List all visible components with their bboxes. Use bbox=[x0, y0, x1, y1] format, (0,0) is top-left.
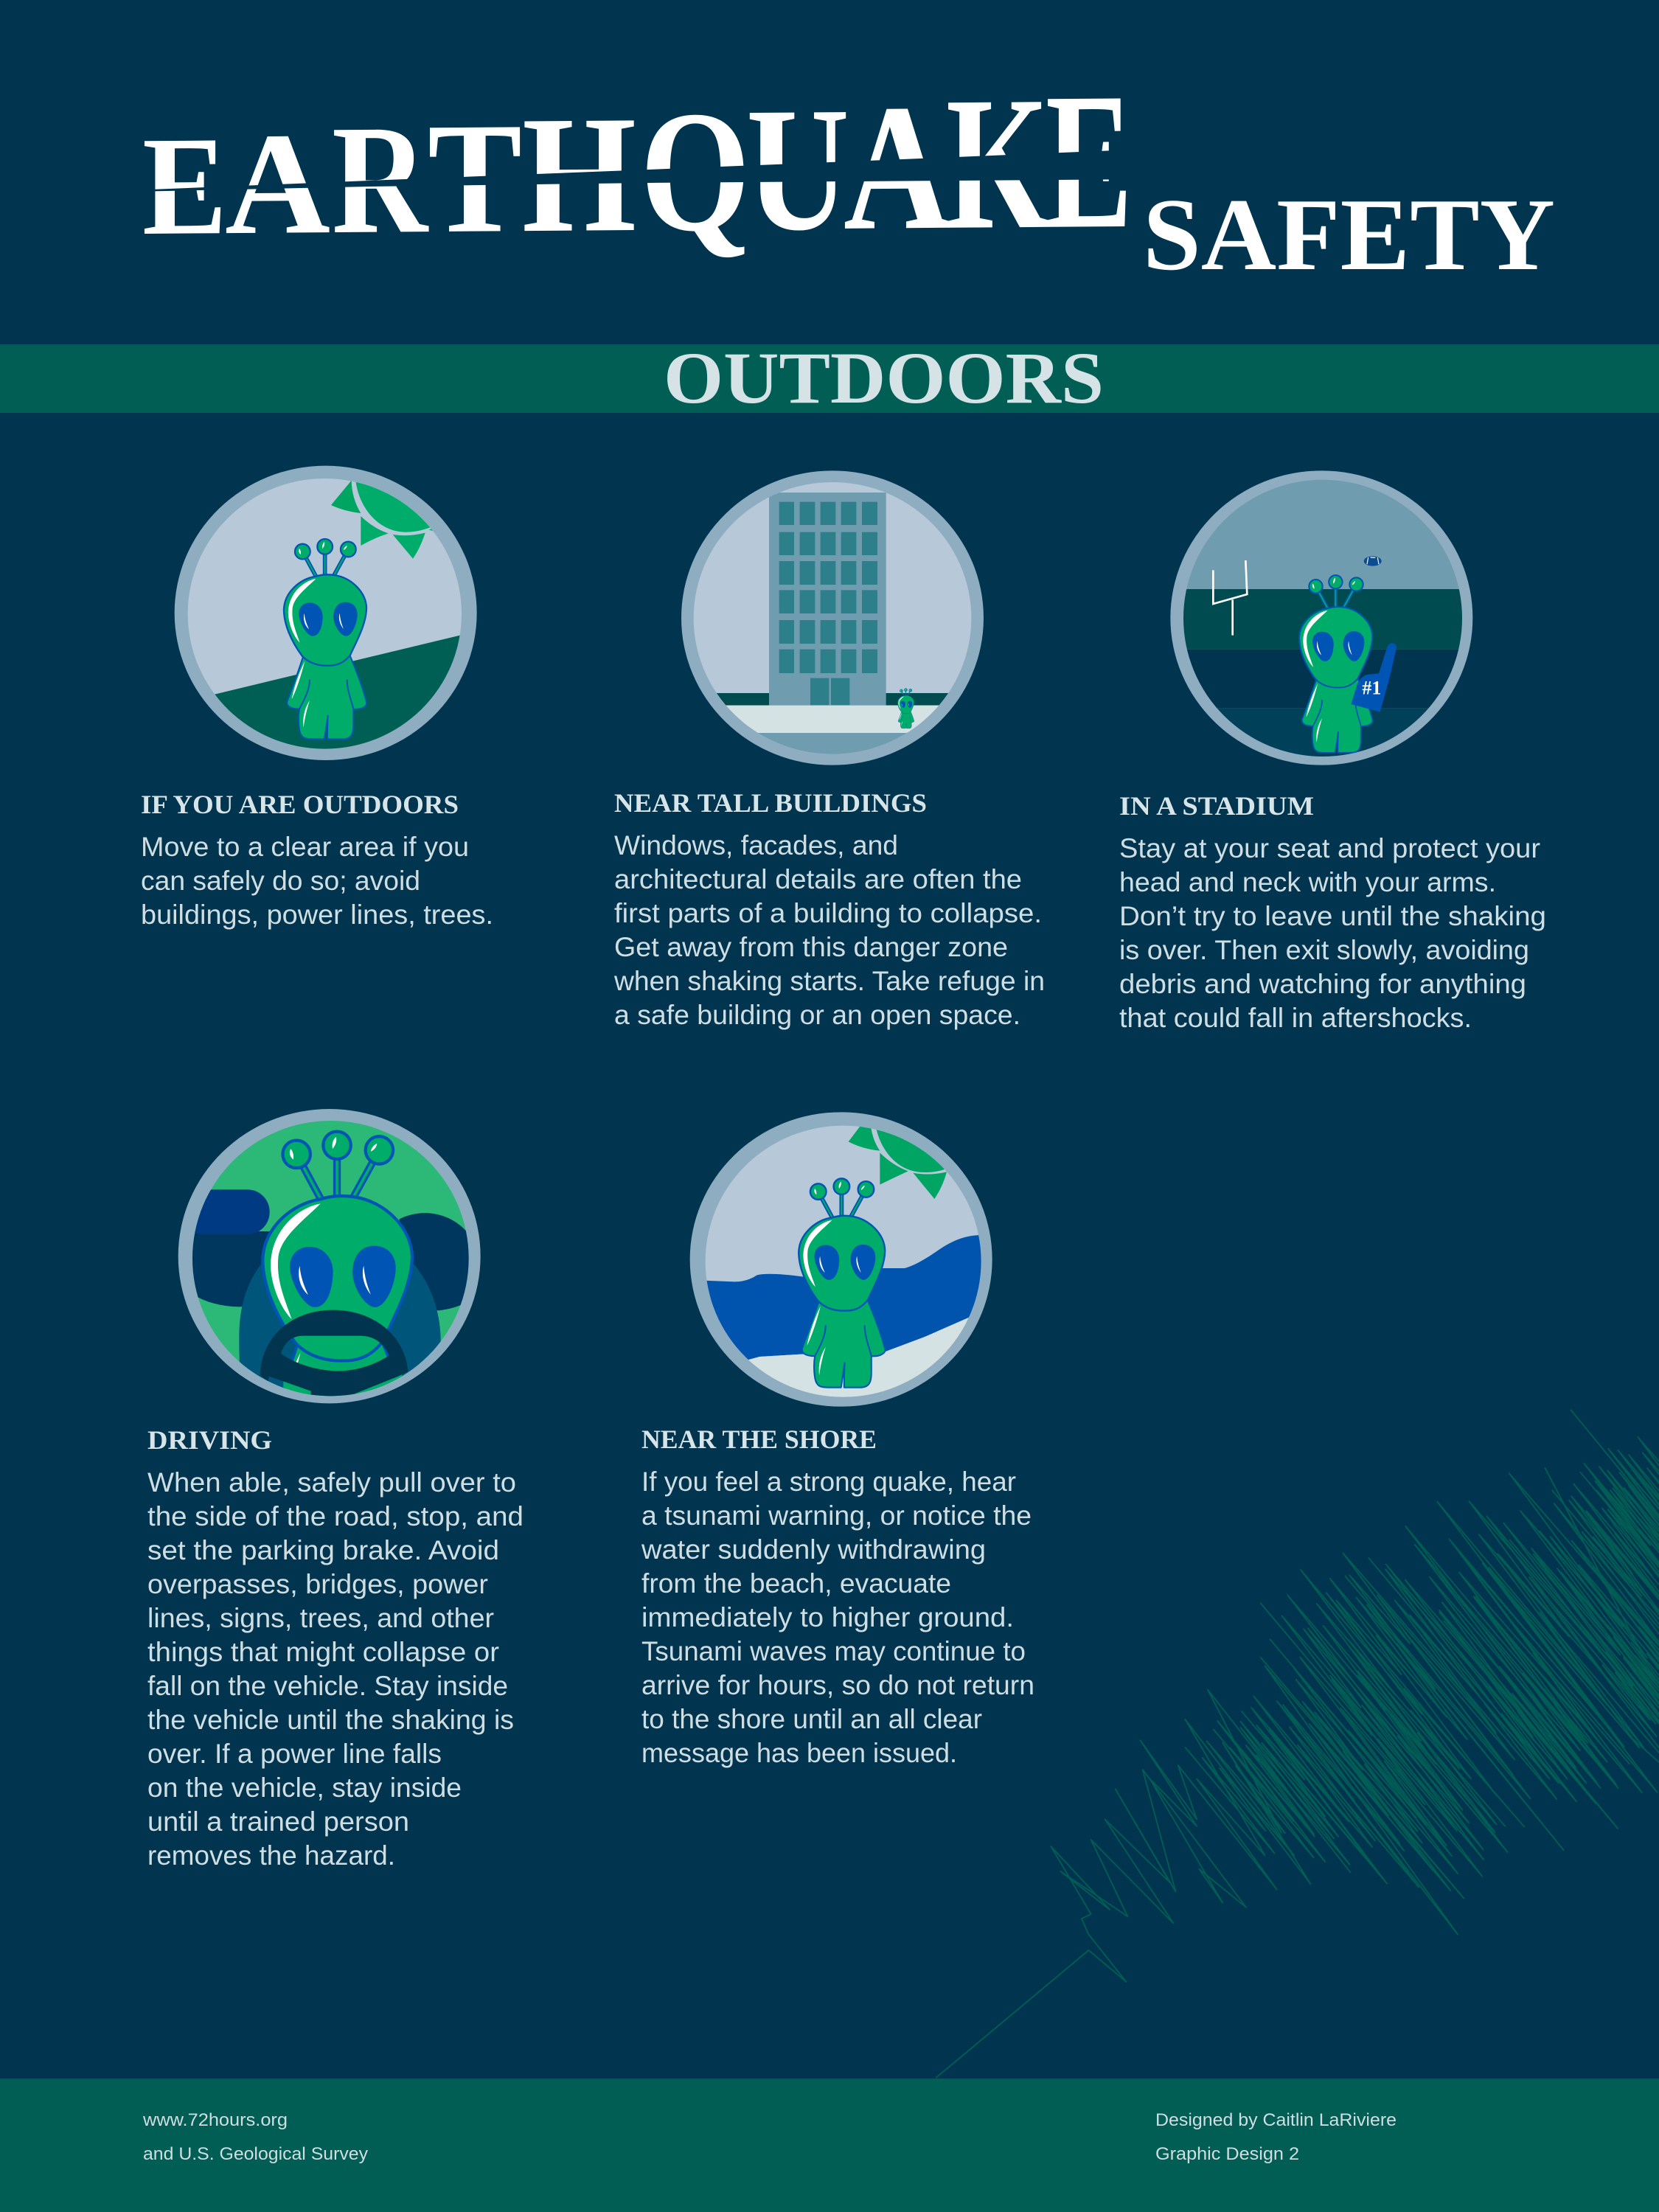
title: Earthquake: E bbox=[1046, 53, 1133, 270]
icon: alien on beach by water bbox=[690, 1112, 992, 1407]
text block: when shaking starts. Take refuge in bbox=[613, 966, 1045, 996]
text block: the vehicle until the shaking is bbox=[147, 1705, 514, 1735]
text block: a safe building or an open space. bbox=[614, 1000, 1020, 1030]
title: Earthquake bbox=[133, 53, 1150, 276]
text block: first parts of a building to collapse. bbox=[614, 898, 1042, 928]
title: Earthquake: U bbox=[746, 71, 849, 268]
text block bbox=[141, 832, 493, 930]
title: Earthquake: K bbox=[946, 58, 1050, 270]
footer credits: Designed by Caitlin LaRiviere bbox=[1155, 2110, 1397, 2130]
text block: arrive for hours, so do not return bbox=[641, 1670, 1034, 1700]
text block: buildings, power lines, trees. bbox=[141, 900, 493, 930]
text block: Don’t try to leave until the shaking bbox=[1119, 901, 1546, 931]
text block: Move to a clear area if you bbox=[141, 832, 469, 862]
text block: Stay at your seat and protect your bbox=[1119, 833, 1540, 863]
title: Earthquake: Q bbox=[640, 75, 751, 268]
text block bbox=[147, 1467, 524, 1871]
footer credits bbox=[1155, 2110, 1397, 2164]
text block: the side of the road, stop, and bbox=[147, 1501, 524, 1531]
text block: from the beach, evacuate bbox=[641, 1568, 951, 1599]
text block: set the parking brake. Avoid bbox=[147, 1535, 499, 1565]
panel: if you are outdoors bbox=[141, 466, 493, 930]
text block: fall on the vehicle. Stay inside bbox=[147, 1671, 508, 1701]
footer sources bbox=[142, 2110, 368, 2164]
seismograph decoration bbox=[936, 1410, 1659, 2078]
footer credits: Graphic Design 2 bbox=[1155, 2144, 1299, 2164]
text block: that could fall in aftershocks. bbox=[1119, 1003, 1472, 1033]
text block: If you feel a strong quake, hear bbox=[641, 1467, 1016, 1497]
text block: a tsunami warning, or notice the bbox=[641, 1500, 1032, 1531]
section band: outdoors bbox=[0, 337, 1659, 419]
text block: When able, safely pull over to bbox=[147, 1467, 516, 1498]
title: Earthquake: A bbox=[844, 67, 950, 268]
text block: on the vehicle, stay inside bbox=[147, 1773, 462, 1803]
heading: NEAR THE SHORE bbox=[641, 1425, 877, 1454]
title: Safety: SAFETY bbox=[1143, 178, 1555, 292]
text block bbox=[641, 1467, 1034, 1768]
text block: head and neck with your arms. bbox=[1119, 867, 1496, 897]
icon: alien with foam finger in stadium: #1 bbox=[1362, 678, 1381, 699]
icon: alien with foam finger in stadium bbox=[1170, 470, 1472, 765]
title: Earthquake: R bbox=[332, 92, 429, 266]
text block: Tsunami waves may continue to bbox=[641, 1636, 1026, 1666]
text block: Windows, facades, and bbox=[614, 830, 898, 860]
text block: overpasses, bridges, power bbox=[147, 1569, 488, 1599]
text block: debris and watching for anything bbox=[1119, 969, 1526, 999]
text block bbox=[1119, 833, 1546, 1033]
panel: driving bbox=[147, 1109, 524, 1871]
section band: outdoors: OUTDOORS bbox=[664, 337, 1104, 419]
heading: IN A STADIUM bbox=[1119, 791, 1314, 821]
text block bbox=[613, 830, 1045, 1030]
footer bbox=[0, 2079, 1659, 2212]
title: Earthquake: H bbox=[522, 82, 636, 268]
text block: until a trained person bbox=[147, 1806, 409, 1837]
heading: IF YOU ARE OUTDOORS bbox=[141, 790, 459, 819]
text block: immediately to higher ground. bbox=[641, 1602, 1014, 1632]
title: Earthquake: T bbox=[428, 89, 522, 266]
panel: in a stadium bbox=[1119, 470, 1546, 1033]
footer sources: and U.S. Geological Survey bbox=[143, 2144, 368, 2164]
text block: over. If a power line falls bbox=[147, 1739, 442, 1769]
icon: alien under sun on hill bbox=[175, 466, 477, 760]
text block: things that might collapse or bbox=[147, 1637, 499, 1667]
text block: to the shore until an all clear bbox=[641, 1704, 982, 1734]
panel: near the shore bbox=[641, 1112, 1034, 1768]
heading: NEAR TALL BUILDINGS bbox=[614, 788, 927, 818]
text block: lines, signs, trees, and other bbox=[147, 1603, 494, 1633]
text block: Get away from this danger zone bbox=[614, 932, 1008, 962]
text block: can safely do so; avoid bbox=[141, 866, 420, 896]
panel: near tall buildings bbox=[613, 470, 1045, 1030]
heading: DRIVING bbox=[147, 1425, 272, 1455]
text block: architectural details are often the bbox=[614, 864, 1022, 894]
text block: removes the hazard. bbox=[147, 1840, 395, 1871]
footer sources: www.72hours.org bbox=[142, 2110, 288, 2130]
title: Earthquake: E bbox=[142, 107, 227, 265]
icon: alien at steering wheel bbox=[178, 1109, 481, 1404]
icon: alien beside tall building bbox=[681, 470, 984, 765]
text block: is over. Then exit slowly, avoiding bbox=[1119, 935, 1529, 965]
title: Earthquake: A bbox=[225, 102, 330, 265]
text block: water suddenly withdrawing bbox=[641, 1534, 986, 1565]
text block: message has been issued. bbox=[641, 1738, 957, 1768]
